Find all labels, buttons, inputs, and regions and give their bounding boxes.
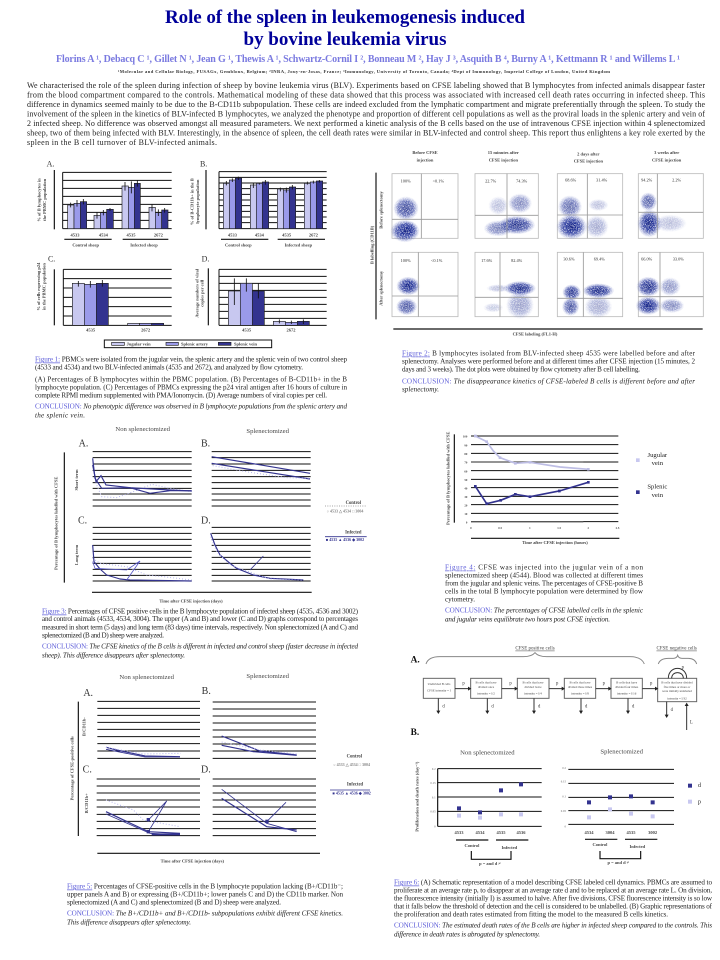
quadrant percentages: 66.0% [641,257,653,262]
figure 4: jugular vs splenic vein chart [445,432,668,545]
model boxes: B cells that have [616,681,638,685]
right plot: splenectomized: 0 [564,824,566,828]
model boxes: B cells that have [570,681,591,685]
figure 3 caption: sheep). This difference disappears after splenectomy. [42,652,185,660]
chart C: cells expressing p24: % of cells expressing p24 [36,262,41,311]
model boxes: divided four times [615,685,639,689]
headings and axes: B/CD11b- [82,717,87,736]
chart A: percentage of B lymphocytes: 4533 [71,233,80,238]
legend: vein and artery colours: Splenic artery [181,342,209,347]
figure 4: jugular vs splenic vein chart: 10 [464,512,468,516]
model boxes: were initially unlabeled [662,689,692,693]
figure 5 caption: This difference disappears after splenectomy. [67,918,191,926]
figure 5 caption: CONCLUSION: The B+/CD11b+ and B+/CD11b- subpopulations exhibit different CFSE kinetics. [67,910,343,918]
chart B: B. [202,686,211,697]
proliferation arrows: p [556,682,559,687]
chart C: C. [78,515,87,526]
headings and axes: Percentage of CFSE-positive cells [70,736,75,800]
figure 4: jugular vs splenic vein chart: 0 [470,526,472,530]
figure 4: jugular vs splenic vein chart: 2 [587,526,589,530]
jugular vein line [474,435,590,471]
left plot: non splenectomized: Control [465,843,480,848]
proliferation arrows: p [603,682,606,687]
column headings: 3 weeks after [654,150,679,155]
model boxes: divided three times [568,685,593,689]
figure 2 caption [402,350,696,394]
chart B: percentage of B-CD11b+: Control sheep [225,242,252,247]
chart A [83,688,200,758]
chart B: B. [201,438,210,449]
affiliations: ¹Molecular and Cellular Biology, FUSAGx, Gembloux, Belgium; ²INRA, Jouy-en-Josas, France; ³Immunology, University of Toronto, Canada; ⁴Dept of Immunology, Imperial College of London, United Kingdom [118,69,610,74]
chart A: percentage of B lymphocytes: A. [47,160,54,169]
figure 2 caption: days and 3 weeks). The dot plots were obtained by flow cytometry after B cell labelling. [402,366,640,374]
proliferation arrows: p [462,682,465,687]
quadrant percentages: <0.1% [433,179,444,184]
legend: control and infected sheep [325,501,367,542]
abstract: difference in dynamics seemed mainly to be due to the B-CD11b subpopulation. These cells are indeed excluded from the lymphatic compartment and migrate preferentially through the spleen. To study the [27,100,705,109]
chart B: percentage of B-CD11b+: 4534 [255,233,265,238]
chart A: percentage of B lymphocytes: 2672 [154,233,164,238]
chart B: percentage of B-CD11b+: Infected sheep [285,242,313,247]
death and replacement arrows: d [538,705,541,710]
model boxes: Undivided B cells [428,682,451,686]
figure 4 caption: cytometry. [445,596,475,604]
death and replacement arrows: d [671,708,674,713]
figure 6 caption: CONCLUSION: The estimated death rates of the B cells are higher in infected sheep compared to the controls. This [394,922,712,930]
abstract: sheep, two of them being infected with BLV. Interestingly, in the absence of spleen, the cell death rates were similar in BLV-infected and control sheep. This report thus enlightens a key role exerted by the [27,128,705,138]
figure 4: jugular vs splenic vein chart: Percentage of B lymphocytes labelled with CFSE [445,432,450,525]
title: Role of the spleen in leukemogenesis induced [165,7,525,28]
figure 3 caption: measured in short term (5 days) and long term (83 days) time intervals, respectively. Non splenectomized (A and C) and [42,624,358,632]
chart C [78,515,192,581]
figure 1 caption: (4533 and 4534) and two BLV-infected animals (4535 and 2672), and analyzed by flow cytometry. [35,364,303,372]
right plot: splenectomized: Infected [629,844,646,849]
quadrant percentages: 74.3% [516,179,528,184]
left plot: non splenectomized: 0 [434,825,436,829]
right plot: splenectomized: 0.05 [561,809,566,813]
chart A: percentage of B lymphocytes: 4534 [99,233,109,238]
chart B: percentage of B-CD11b+: % of B-CD11b+ in the B [189,178,194,225]
figure 6B: proliferation and death rates: Proliferation and death rates (day⁻¹) [414,761,419,832]
figure 2 caption: splenectomy. [402,386,439,394]
abstract: involvement of the spleen in the kinetics of BLV-infected B lymphocytes, we analyzed the phenotype and proportion of different cell populations as well as the proviral loads in the splenic artery and vein of [27,110,705,118]
figure 4 caption: and jugular veins equilibrate two hours post CFSE injection. [445,616,610,624]
headings and axes: Long term [74,545,79,565]
title [165,7,525,50]
chart C: cells expressing p24: in the PBMC population [42,263,47,310]
figure 4: jugular vs splenic vein chart: 30 [464,495,468,499]
chart B [202,686,316,758]
right plot: splenectomized: Control [593,842,608,847]
legend: control and infected sheep: Control [347,755,363,760]
proliferation arrows [455,666,687,691]
row labels and axes: CFSE labeling (FL1-H) [513,331,558,336]
quadrant percentages [401,178,684,263]
death and replacement arrows: L [690,720,693,725]
figure 4: jugular vs splenic vein chart: 50 [464,478,468,482]
headings and axes: Splenectomized [246,673,290,680]
left plot: non splenectomized: p = and d ≠ [479,861,501,866]
proliferation arrows: p [650,682,653,687]
quadrant percentages: 2.2% [672,178,682,183]
figure 6 caption: difference in death rates is abrogated by splenectomy. [394,930,540,938]
chart C: cells expressing p24: 2672 [141,328,151,333]
headings and axes: Percentage of B lymphocytes labelled with CFSE [53,477,58,570]
left plot: non splenectomized: 0.2 [432,767,436,771]
row labels and axes: B labelling (CD11B) [369,225,374,264]
chart D: D. [201,515,211,526]
proliferation arrows: p [682,666,685,671]
chart D [201,765,316,836]
model boxes: B cells that have [523,681,544,685]
chart B: percentage of B-CD11b+ [189,160,327,247]
figure 4: jugular vs splenic vein chart: 20 [464,503,468,507]
chart C [83,765,200,836]
right plot: splenectomized: 3002 [648,830,658,835]
figure 6A: compartment model: A. [411,656,420,666]
figure 6B: proliferation and death rates: Non splenectomized [460,750,515,757]
chart D: viral copies per cell: copies per cell [200,279,205,307]
headings and axes: Time after CFSE injection (days) [161,858,225,863]
legend: control and infected sheep: ○ 4533 △ 4534 □ 3004 [333,762,370,767]
CFSE positive heading and brace: CFSE positive cells [515,647,555,652]
model boxes: intensity = I/32 [667,696,687,700]
quadrant percentages: 94.2% [641,178,653,183]
legend: jugular and splenic vein: vein [652,460,664,467]
authors: Florins A ¹, Debacq C ¹, Gillet N ¹, Jean G ¹, Thewis A ¹, Schwartz-Cornil I ², Bonneau M ², Hay J ³, Asquith B ⁴, Burny A ¹, Kettmann R ¹ and Willems L ¹ [56,54,680,65]
column headings: CFSE injection [652,158,682,163]
quadrant percentages: 100% [401,179,411,184]
right plot: splenectomized [561,766,674,865]
figure 5 caption [67,882,343,926]
left plot: non splenectomized: Infected [501,845,518,850]
chart C: cells expressing p24: C. [48,255,55,264]
quadrant percentages: 33.0% [673,257,684,262]
figure 3 caption: Figure 3: Percentages of CFSE positive cells in the B lymphocyte population of infected sheep (4535, 4536 and 3002) [42,608,359,616]
legend: control and infected sheep: Infected [345,530,362,535]
headings and axes: Non splenectomized [119,674,175,681]
left plot: non splenectomized: 0.1 [432,795,436,799]
figure 3 caption: CONCLUSION: The CFSE kinetics of the B cells is different in infected and control sheep (faster decrease in infected [42,642,358,650]
chart D: viral copies per cell: Average numbers of viral [194,268,199,318]
figure 6 caption: proliferate at an average rate p, to disappear at an average rate d and to be replaced at an average rate L. On division, [394,886,712,894]
quadrant percentages: 22.7% [485,179,497,184]
row labels and axes [369,173,703,336]
quadrant percentages: 100% [401,258,411,263]
chart A: percentage of B lymphocytes: Control sheep [72,242,100,247]
figure 5 caption: upper panels A and B) or expressing (B+/CD11b+; lower panels C and D) the CD11b marker. Non [67,890,343,898]
figure 6 caption: the fluorescence intensity (initially I) is assumed to halve. After five divisions, CFSE fluorescence intensity is so low [394,894,713,902]
model boxes: divided twice [524,685,542,689]
figure 3 caption: splenectomized (B and D) sheep were analyzed. [42,632,164,640]
chart D: viral copies per cell: D. [202,255,209,264]
model boxes: five times or more or [664,685,691,689]
legend: control and infected sheep: ■ 4535 ▲ 4536 ◆ 3002 [333,791,371,796]
figure 5 caption: Figure 5: Percentages of CFSE-positive cells in the B lymphocyte population lacking (B+/CD11b⁻; [67,882,343,890]
figure 4 caption [445,564,644,624]
figure 1 caption: Figure 1: PBMCs were isolated from the jugular vein, the splenic artery and the splenic vein of two control sheep [35,356,347,364]
figure 4: jugular vs splenic vein chart: 40 [464,486,468,490]
legend: d and p: p [698,800,701,806]
figure 4: jugular vs splenic vein chart: 60 [464,469,468,473]
chart A: percentage of B lymphocytes: % of B lymphocytes in [37,178,42,222]
chart C: C. [83,765,92,776]
left plot: non splenectomized: 0.05 [430,810,436,814]
abstract: spleen in the B cell turnover of BLV-infected animals. [27,138,217,147]
chart B: percentage of B-CD11b+: 4535 [282,233,292,238]
model boxes: CFSE intensity = I [427,689,451,693]
model boxes: divided once [478,685,495,689]
headings and axes [53,426,312,603]
figure 3 caption: and control animals (4533, 4534, 3004). The upper (A and B) and lower (C and D) graphs correspond to percentages [42,615,358,623]
legend: control and infected sheep: ■ 4535 ▲ 4536 ◆ 3002 [326,537,364,542]
figure 6 caption: that it falls below the threshold of detection and the cell is considered to be unlabelled. (B) Graphic representations of [394,902,713,910]
figure 4: jugular vs splenic vein chart: 2.5 [616,526,620,530]
legend: vein and artery colours: Jugular vein [127,342,151,347]
chart A [79,438,192,506]
legend: control and infected sheep: ○ 4533 △ 4534 □ 3004 [327,508,363,513]
chart B: percentage of B-CD11b+: 4533 [228,233,238,238]
left plot: non splenectomized: 4534 [476,830,485,835]
CFSE positive heading and brace [426,647,644,664]
legend: jugular and splenic vein: vein [652,492,664,499]
legend: vein and artery colours [104,340,272,348]
title: by bovine leukemia virus [244,29,446,50]
figure 1 caption: complete RPMI medium supplemented with PMA/Ionomycin. (D) Average numbers of viral copies per cell. [35,392,327,400]
quadrant lines [392,174,703,317]
abstract: We characterised the role of the spleen during infection of sheep by bovine leukemia virus (BLV). Experiments based on CFSE labeling showed that B lymphocytes from infected animals disappear faster [27,81,705,90]
abstract: 2 infected sheep. No difference was observed amongst all measured parameters. We next performed a kinetic analysis of the B cells based on the use of intravenous CFSE injection within 4 splenectomized [27,119,705,128]
legend: d and p [688,783,701,806]
left plot: non splenectomized [430,767,542,866]
chart D: viral copies per cell: 2672 [287,328,296,333]
legend: control and infected sheep: Control [346,501,362,506]
right plot: splenectomized: 0.1 [562,795,567,799]
figure 2 caption: splenectomy. Analyses were performed before and at different times after CFSE injection (15 minutes, 2 [402,358,695,366]
CFSE negative heading and brace: CFSE negative cells [656,647,697,652]
chart D [201,515,311,581]
figure 1 caption [35,356,347,420]
model boxes: intensity = I/8 [571,692,589,696]
figure 6 caption [394,878,713,938]
death and replacement arrows: d [632,705,635,710]
chart A: A. [79,438,88,449]
quadrant percentages: <0.1% [431,258,443,263]
death and replacement arrows [436,698,693,730]
legend: jugular and splenic vein: Jugular [648,452,668,459]
column headings: CFSE injection [489,158,518,163]
death and replacement arrows: d [442,705,445,710]
splenic vein line [474,481,590,505]
figure 4 caption: CONCLUSION: The percentages of CFSE labelled cells in the splenic [445,606,644,614]
chart A: percentage of B lymphocytes: 4535 [127,233,136,238]
chart D: viral copies per cell [194,255,327,333]
cell populations [370,145,720,345]
figure 6B: proliferation and death rates [414,749,701,866]
column headings: 2 days after [577,152,600,157]
legend: control and infected sheep: Infected [347,783,364,788]
figure 4: jugular vs splenic vein chart: 100 [463,435,468,439]
abstract: from the blood compartment compared to the controls. Mathematical modeling of these data showed that this process was associated with increased cell death rates occurring in infected sheep. This [27,90,705,100]
death and replacement arrows: d [585,705,588,710]
figure 2 caption: CONCLUSION: The disappearance kinetics of CFSE-labeled B cells is different before and after [402,378,695,386]
legend: d and p: d [698,783,701,789]
left plot: non splenectomized: 0.15 [430,781,436,785]
panels [392,174,703,317]
right plot: splenectomized: 0.2 [562,766,567,770]
figure 6B: proliferation and death rates: Splenectomized [600,749,644,756]
figure 4: jugular vs splenic vein chart: 80 [464,452,468,456]
figure 4: jugular vs splenic vein chart: 1.5 [557,526,562,530]
chart A: percentage of B lymphocytes: Infected sheep [130,242,158,247]
right plot: splenectomized: p = and d ≠ [607,860,630,865]
figure 5 caption: splenectomized (A and C) and splenectomized (B and D) sheep were analyzed. [67,898,281,906]
quadrant percentages: 69.4% [594,257,605,262]
right plot: splenectomized: 4534 [585,830,594,835]
death and replacement arrows: d [491,705,494,710]
chart A: percentage of B lymphocytes: the PBMC population [42,178,47,221]
chart B [201,438,311,506]
model boxes: B cells that have [476,681,497,685]
figure 4: jugular vs splenic vein chart: 0 [466,520,468,524]
chart A: A. [83,688,93,699]
figure 4 caption: cells in the total B lymphocyte population were determined by flow [445,588,644,596]
figure 4: jugular vs splenic vein chart: 0.5 [498,526,503,530]
figure 6 caption: Figure 6: (A) Schematic representation of a model describing CFSE labeled cell dynamics. PBMCs are assumed to [394,878,712,886]
model boxes: intensity = I/16 [617,692,637,696]
model boxes: intensity = I/4 [524,692,542,696]
column headings: 15 minutes after [488,150,519,155]
legend: jugular and splenic vein [636,452,668,499]
figure 4: jugular vs splenic vein chart: 70 [464,461,468,465]
figure 1 caption: lymphocyte population. (C) Percentages of PBMCs expressing the p24 viral antigen after 16 hours of culture in [35,384,347,392]
figure 6A: compartment model [411,647,697,738]
quadrant percentages: 82.4% [511,258,523,263]
column headings: injection [417,158,434,163]
chart C: cells expressing p24 [36,255,172,333]
chart B: percentage of B-CD11b+: 2672 [309,233,319,238]
figure 4 caption: Figure 4: CFSE was injected into the jugular vein of a non [445,564,643,572]
column headings: CFSE injection [574,159,603,164]
legend: vein and artery colours: Splenic vein [234,342,258,347]
figure 3: CFSE kinetics charts [53,426,367,603]
figure 1 caption: the splenic vein. [35,412,85,420]
model boxes: B cells that have divided [661,681,693,685]
figure 1 caption: (A) Percentages of B lymphocytes within the PBMC population. (B) Percentages of B-CD11b+ in the B [35,376,347,384]
CFSE negative heading and brace [656,647,697,664]
figure 6 caption: the proliferation and death rates estimated from fitting the model to the measured B cells kinetics. [394,910,668,918]
row labels and axes: Before splenectomy [378,191,383,229]
figure 2 caption: Figure 2: B lymphocytes isolated from BLV-infected sheep 4535 were labelled before and after [402,350,696,358]
chart B: percentage of B-CD11b+: lymphocyte population [195,179,200,224]
figure 4 caption: from the jugular and splenic veins. The percentages of CFSE-positive B [445,580,643,588]
headings and axes: Non splenectomized [115,426,171,433]
figure 1 charts [36,160,327,348]
chart B: percentage of B-CD11b+: B. [200,160,207,169]
right plot: splenectomized: 0.15 [561,780,566,784]
figure 6A: compartment model: B. [411,728,419,738]
proliferation arrows: p [509,682,512,687]
figure 4 caption: splenectomized sheep (4544). Blood was collected at different times [445,572,643,580]
quadrant percentages: 17.6% [481,258,493,263]
quadrant percentages: 30.6% [563,257,575,262]
column headings [412,150,682,164]
model boxes: intensity = I/2 [477,692,495,696]
chart C: cells expressing p24: 4535 [86,328,96,333]
right plot: splenectomized: 4535 [627,830,636,835]
headings and axes: Splenectomized [246,428,290,435]
column headings: Before CFSE [412,150,438,155]
model boxes [423,678,697,702]
chart D: D. [201,765,211,776]
headings and axes: Time after CFSE injection (days) [159,598,223,603]
abstract [27,81,705,147]
row labels and axes: After splenectomy [378,270,383,306]
figure 5: CD11b subpopulation charts [70,673,371,863]
figure 1 caption: CONCLUSION: No phenotypic difference was observed in B lymphocyte populations from the splenic artery and [35,402,347,410]
quadrant percentages: 31.4% [596,178,608,183]
chart A: percentage of B lymphocytes [37,160,172,247]
right plot: splenectomized: 3004 [606,830,615,835]
figure 4: jugular vs splenic vein chart: Time after CFSE injection (hours) [522,540,588,545]
legend: control and infected sheep [330,755,371,796]
headings and axes [70,673,320,863]
left plot: non splenectomized: 4533 [455,830,464,835]
figure 3 caption [42,608,359,660]
legend: jugular and splenic vein: Splenic [647,484,667,491]
left plot: non splenectomized: 4536 [517,830,526,835]
chart D: viral copies per cell: 4535 [242,328,252,333]
quadrant percentages: 68.6% [565,178,577,183]
figure 4: jugular vs splenic vein chart: 90 [464,443,468,447]
headings and axes: B/CD11b+ [84,793,89,813]
headings and axes: Short term [74,469,79,491]
figure 4: jugular vs splenic vein chart: 1 [529,526,531,530]
left plot: non splenectomized: 4535 [497,830,506,835]
figure 2: flow cytometry dot plots [369,145,720,345]
